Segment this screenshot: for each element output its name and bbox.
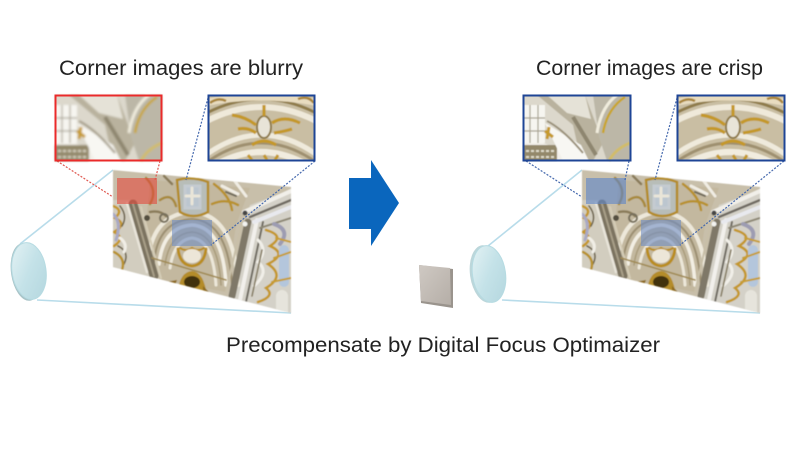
arrow: to the right — [349, 160, 399, 246]
inset: crisp corner detail — [523, 95, 630, 161]
icon: digital focus optimizer chip — [419, 265, 453, 308]
panel: crisp projection — [466, 95, 789, 315]
panel: blurry projection — [7, 95, 320, 315]
blue highlight: corner region — [586, 178, 626, 204]
inset: blurry corner detail — [55, 95, 162, 161]
red highlight: corner region — [117, 178, 157, 204]
blue highlight: centre region — [172, 220, 212, 246]
inset: crisp centre detail — [672, 95, 789, 173]
heading: corner images are blurry: Corner images are blurry — [59, 56, 303, 80]
projection light beam — [488, 170, 760, 313]
projected ceiling image — [579, 165, 764, 315]
heading: corner images are crisp: Corner images are crisp — [536, 56, 763, 80]
red dotted connector lines — [57, 161, 160, 197]
projected ceiling image — [110, 165, 295, 315]
blue dotted connector lines — [526, 98, 784, 245]
projection light beam — [20, 170, 291, 313]
inset: sharp centre detail — [203, 95, 320, 173]
blue highlight: centre region — [641, 220, 681, 246]
caption: precompensate by digital focus optimaizer: Precompensate by Digital Focus Optimaizer — [226, 333, 660, 357]
icon: projection lens — [7, 240, 50, 303]
icon: projection lens — [466, 243, 509, 305]
blue dotted connector lines — [186, 98, 315, 245]
